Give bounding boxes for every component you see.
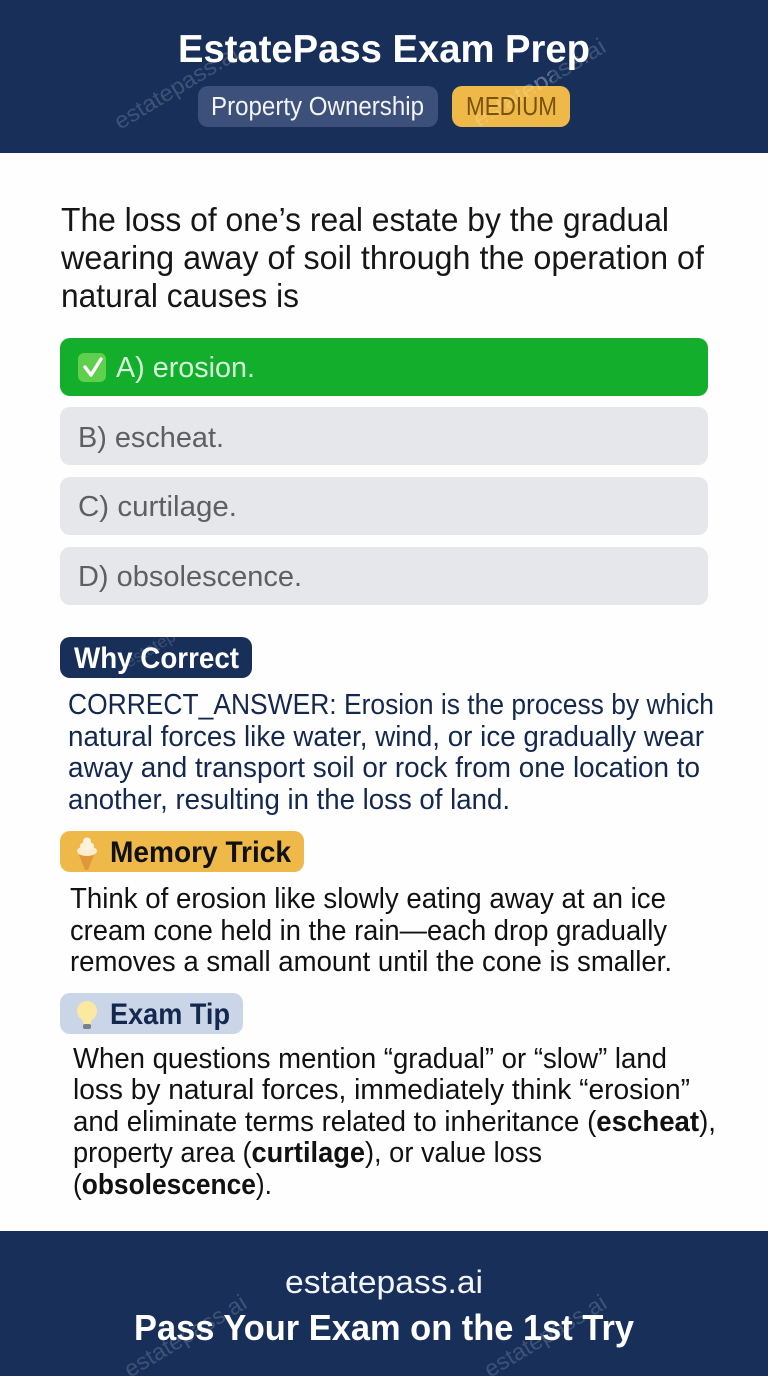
question text [60, 201, 705, 314]
category pill [198, 86, 438, 127]
memory trick text: cream cone held in the rain—each drop gradually [70, 915, 668, 947]
header band [0, 0, 768, 153]
exam tip text: (obsolescence). [73, 1169, 272, 1201]
title: EstatePass Exam Prep [178, 28, 590, 71]
icon: check mark [78, 353, 106, 382]
exam tip heading pill [60, 993, 243, 1034]
exam tip heading pill: Exam Tip [110, 998, 230, 1031]
why correct heading pill: estatep [121, 626, 179, 671]
why correct explanation [68, 689, 714, 816]
why correct explanation: CORRECT_ANSWER: Erosion is the process by which [68, 689, 714, 721]
question text: wearing away of soil through the operation of [60, 239, 705, 276]
difficulty pill: MEDIUM [466, 93, 557, 121]
option D [60, 547, 708, 605]
option B [60, 407, 708, 465]
category pill: Property Ownership [211, 93, 424, 121]
difficulty pill: estatepass.ai [468, 33, 610, 132]
option A correct [60, 338, 708, 396]
memory trick text: removes a small amount until the cone is smaller. [70, 946, 672, 978]
option A correct: A) erosion. [116, 352, 255, 384]
why correct heading pill [60, 626, 252, 678]
header band: estatepass.ai [109, 40, 243, 134]
memory trick heading pill [60, 831, 304, 872]
footer website: estatepass.ai [285, 1264, 483, 1300]
exam tip text: When questions mention “gradual” or “slow” land [73, 1043, 667, 1075]
exam tip text: and eliminate terms related to inheritance (escheat), [73, 1106, 716, 1138]
difficulty pill [452, 70, 570, 127]
header band: estatepass.ai [468, 33, 610, 132]
memory trick text [70, 883, 672, 978]
footer band [0, 1231, 768, 1376]
option B: B) escheat. [78, 422, 224, 454]
question text: The loss of one’s real estate by the gradual [61, 201, 669, 238]
memory trick heading pill: Memory Trick [110, 836, 292, 869]
exam tip text: loss by natural forces, immediately think “erosion” [73, 1074, 690, 1106]
option D: D) obsolescence. [78, 561, 302, 593]
question text: natural causes is [61, 277, 299, 314]
why correct explanation: away and transport soil or rock from one location to [68, 752, 700, 784]
memory trick text: Think of erosion like slowly eating away at an ice [70, 883, 666, 915]
exam tip text [73, 1043, 716, 1201]
why correct heading pill: Why Correct [74, 642, 239, 675]
exam tip text: property area (curtilage), or value loss [73, 1137, 542, 1169]
icon: light bulb [77, 1001, 97, 1029]
option C: C) curtilage. [78, 491, 237, 523]
option C [60, 477, 708, 535]
why correct explanation: another, resulting in the loss of land. [68, 784, 510, 816]
icon: ice cream cone [77, 838, 97, 870]
why correct explanation: natural forces like water, wind, or ice gradually wear [68, 721, 704, 753]
footer tagline: Pass Your Exam on the 1st Try [134, 1307, 634, 1348]
